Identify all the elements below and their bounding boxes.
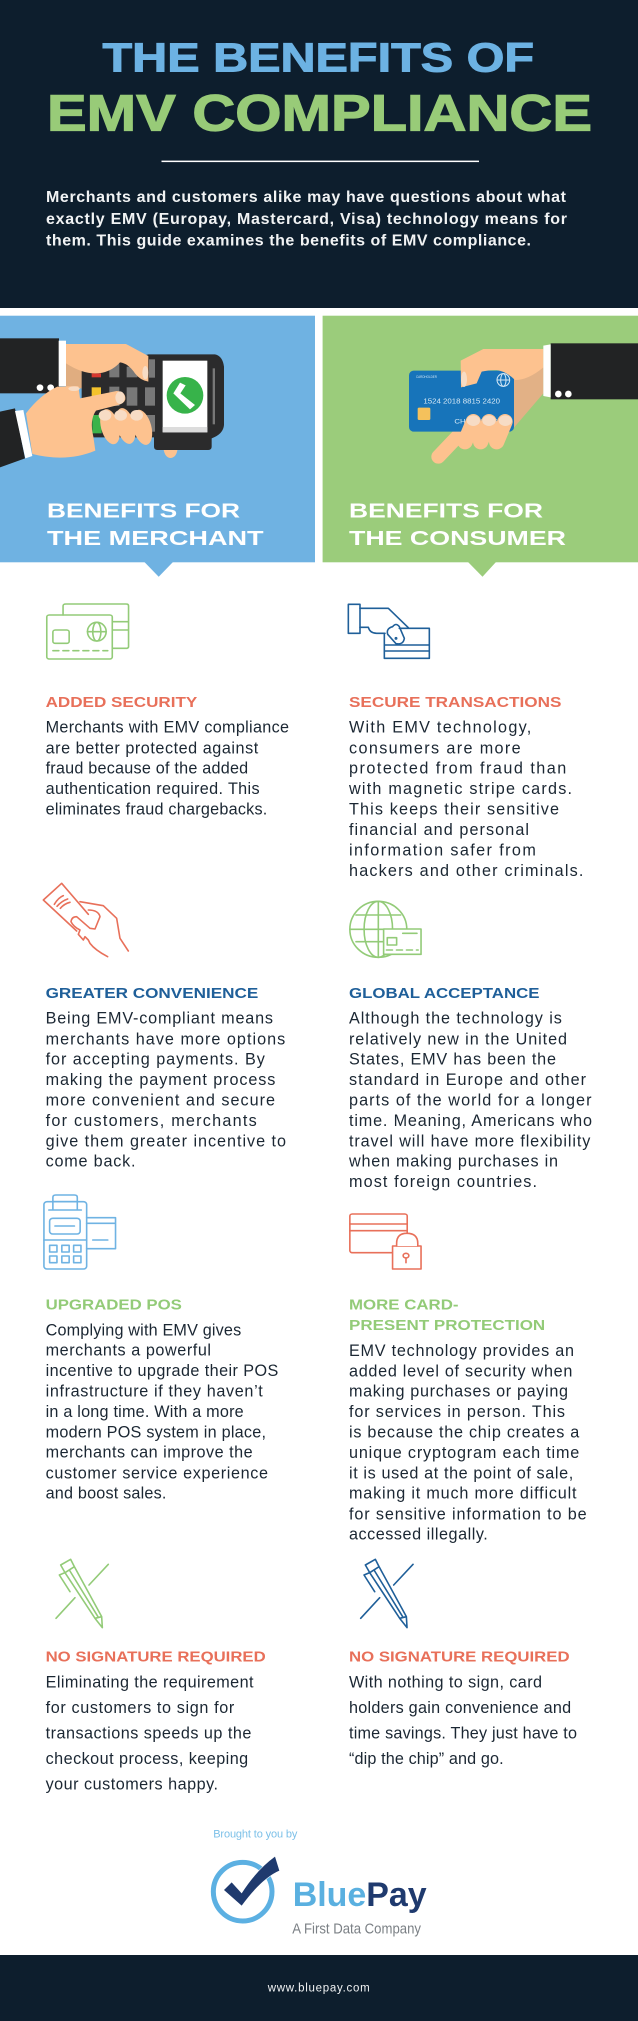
benefit: greater convenience (43, 883, 286, 1171)
panel heading: BENEFITS FOR (47, 500, 240, 523)
body text: making purchases or paying (349, 1383, 568, 1401)
body text: and boost sales. (46, 1485, 166, 1503)
title line 1: THE BENEFITS OF (102, 35, 534, 81)
icon: hand tapping card (43, 883, 128, 957)
heading: SECURE TRANSACTIONS (349, 695, 562, 711)
body text: most foreign countries. (349, 1173, 537, 1191)
body text: With EMV technology, (349, 719, 531, 737)
icon: globe and card (350, 901, 421, 957)
body text: relatively new in the United (349, 1030, 567, 1048)
body text: eliminates fraud chargebacks. (46, 800, 267, 818)
body text: Merchants with EMV compliance (46, 719, 289, 737)
logo: BluePay: A First Data Company (292, 1921, 422, 1937)
logo: BluePay (213, 1857, 427, 1937)
body text (46, 1674, 254, 1794)
heading: UPGRADED POS (46, 1297, 182, 1313)
footer bar (0, 1955, 638, 2021)
body text: travel will have more flexibility (349, 1132, 591, 1150)
body text: more convenient and secure (46, 1091, 275, 1109)
body text: time. Meaning, Americans who (349, 1112, 592, 1130)
panel: benefits for the merchant (0, 316, 315, 577)
benefit: more card-present protection (349, 1214, 587, 1544)
body text: parts of the world for a longer (349, 1091, 592, 1109)
intro paragraph (46, 189, 567, 250)
body text: information safer from (349, 841, 536, 859)
website url: www.bluepay.com (267, 1983, 370, 1995)
heading: MORE CARD- (349, 1297, 459, 1313)
intro paragraph: Merchants and customers alike may have questions about what (46, 189, 567, 206)
icon: POS terminal and card (44, 1195, 116, 1269)
illustration: hand holding credit card (409, 343, 638, 457)
benefit: no signature required (merchant) (46, 1559, 266, 1794)
body text: Complying with EMV gives (46, 1321, 241, 1339)
body text: in a long time. With a more (46, 1403, 244, 1421)
benefit: global acceptance (348, 901, 592, 1191)
body text: modern POS system in place, (46, 1423, 266, 1441)
body text: making it much more difficult (349, 1485, 577, 1503)
body text: merchants have more options (46, 1030, 285, 1048)
body text (348, 719, 583, 880)
body text: customer service experience (46, 1464, 268, 1482)
body text: standard in Europe and other (349, 1071, 587, 1089)
body text (46, 1321, 278, 1503)
body text: checkout process, keeping (46, 1750, 248, 1768)
body text: for sensitive information to be (349, 1505, 587, 1523)
body text: protected from fraud than (349, 760, 566, 778)
illustration: hands using payment terminal (0, 338, 224, 467)
icon: hand with card (348, 604, 429, 658)
body text: “dip the chip” and go. (349, 1750, 504, 1768)
benefit: upgraded POS (44, 1195, 278, 1503)
panel heading (349, 500, 566, 550)
body text: This keeps their sensitive (349, 800, 559, 818)
body text (349, 1342, 587, 1544)
benefit: no signature required (consumer) (349, 1559, 577, 1768)
title line 2: EMV COMPLIANCE (47, 85, 592, 142)
body text: your customers happy. (46, 1776, 218, 1794)
body text: fraud because of the added (46, 760, 248, 778)
body text: consumers are more (349, 739, 521, 757)
illustration: hand holding credit card: CHRIS DOE (454, 418, 498, 425)
intro paragraph: exactly EMV (Europay, Mastercard, Visa) technology means for (46, 211, 567, 228)
body text: added level of security when (349, 1362, 572, 1380)
body text: incentive to upgrade their POS (46, 1362, 278, 1380)
body text: for customers to sign for (46, 1699, 235, 1717)
body text: EMV technology provides an (349, 1342, 574, 1360)
body text: Although the technology is (349, 1010, 562, 1028)
icon: card with padlock (350, 1214, 421, 1269)
body text: infrastructure if they haven’t (46, 1382, 263, 1400)
body text: time savings. They just have to (349, 1725, 577, 1743)
icon: crossed-out pen (361, 1559, 413, 1628)
body text (349, 1674, 577, 1768)
body text: unique cryptogram each time (349, 1444, 579, 1462)
panel heading: BENEFITS FOR (349, 500, 543, 523)
body text: Eliminating the requirement (46, 1674, 254, 1692)
heading (349, 1297, 545, 1334)
panel: benefits for the consumer (323, 316, 638, 577)
body text: give them greater incentive to (46, 1132, 286, 1150)
body text (46, 1010, 286, 1171)
panel: header (0, 0, 638, 308)
body text: With nothing to sign, card (349, 1674, 542, 1692)
heading: GLOBAL ACCEPTANCE (349, 986, 540, 1002)
brought to you by: Brought to you by (213, 1828, 298, 1840)
icon: crossed-out pen (56, 1559, 108, 1628)
body text: come back. (46, 1153, 136, 1171)
benefit: secure transactions (348, 604, 583, 880)
panel heading (47, 500, 264, 550)
icon: credit cards with globe (47, 604, 129, 659)
body text: Being EMV-compliant means (46, 1010, 273, 1028)
body text: merchants a powerful (46, 1342, 211, 1360)
body text: are better protected against (46, 739, 259, 757)
body text: merchants can improve the (46, 1444, 253, 1462)
body text: with magnetic stripe cards. (348, 780, 572, 798)
illustration: hand holding credit card: CARDHOLDER (416, 375, 437, 379)
body text (46, 719, 289, 818)
body text: for customers, merchants (46, 1112, 257, 1130)
heading: ADDED SECURITY (46, 695, 198, 711)
body text: hackers and other criminals. (349, 862, 583, 880)
panel heading: THE MERCHANT (47, 527, 264, 550)
body text (348, 1010, 592, 1191)
body text: it is used at the point of sale, (349, 1464, 573, 1482)
intro paragraph: them. This guide examines the benefits of EMV compliance. (46, 233, 531, 250)
body text: accessed illegally. (349, 1526, 488, 1544)
body text: when making purchases in (348, 1153, 558, 1171)
body text: holders gain convenience and (349, 1699, 571, 1717)
panel heading: THE CONSUMER (349, 527, 566, 550)
body text: for services in person. This (349, 1403, 565, 1421)
body text: transactions speeds up the (46, 1725, 251, 1743)
body text: States, EMV has been the (349, 1051, 556, 1069)
body text: is because the chip creates a (349, 1424, 579, 1442)
logo: BluePay: BluePay (293, 1876, 427, 1914)
body text: for accepting payments. By (46, 1051, 266, 1069)
heading: NO SIGNATURE REQUIRED (349, 1650, 570, 1666)
body text: authentication required. This (46, 780, 260, 798)
heading: NO SIGNATURE REQUIRED (46, 1650, 266, 1666)
body text: making the payment process (46, 1071, 275, 1089)
benefit: added security (46, 604, 289, 818)
illustration: hand holding credit card: 1524 2018 8815 2420 (423, 396, 500, 405)
heading: GREATER CONVENIENCE (46, 986, 259, 1002)
body text: financial and personal (349, 821, 529, 839)
heading: PRESENT PROTECTION (349, 1318, 545, 1334)
